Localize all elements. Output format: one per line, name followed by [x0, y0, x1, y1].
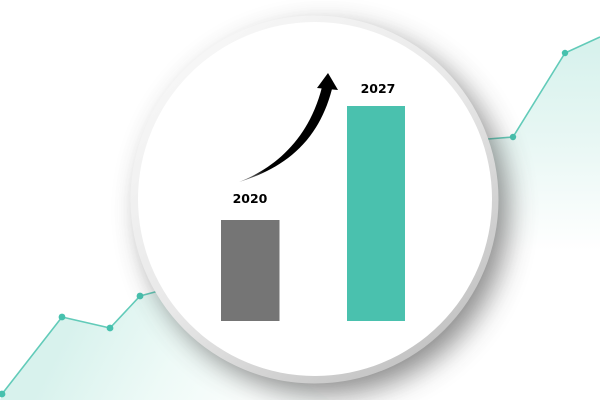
- chart: left background area and line: [0, 288, 330, 400]
- circle outer ring: [130, 16, 498, 384]
- circle white panel: [138, 22, 492, 376]
- bar: 2020: [221, 220, 280, 321]
- circle drop shadow: [142, 28, 508, 394]
- chart: right background area and line: [480, 37, 600, 252]
- label: 2027: 2027: [361, 81, 395, 96]
- bar: 2027: [347, 106, 405, 321]
- label: 2020: 2020: [233, 191, 268, 206]
- arrow: growth: [239, 73, 338, 182]
